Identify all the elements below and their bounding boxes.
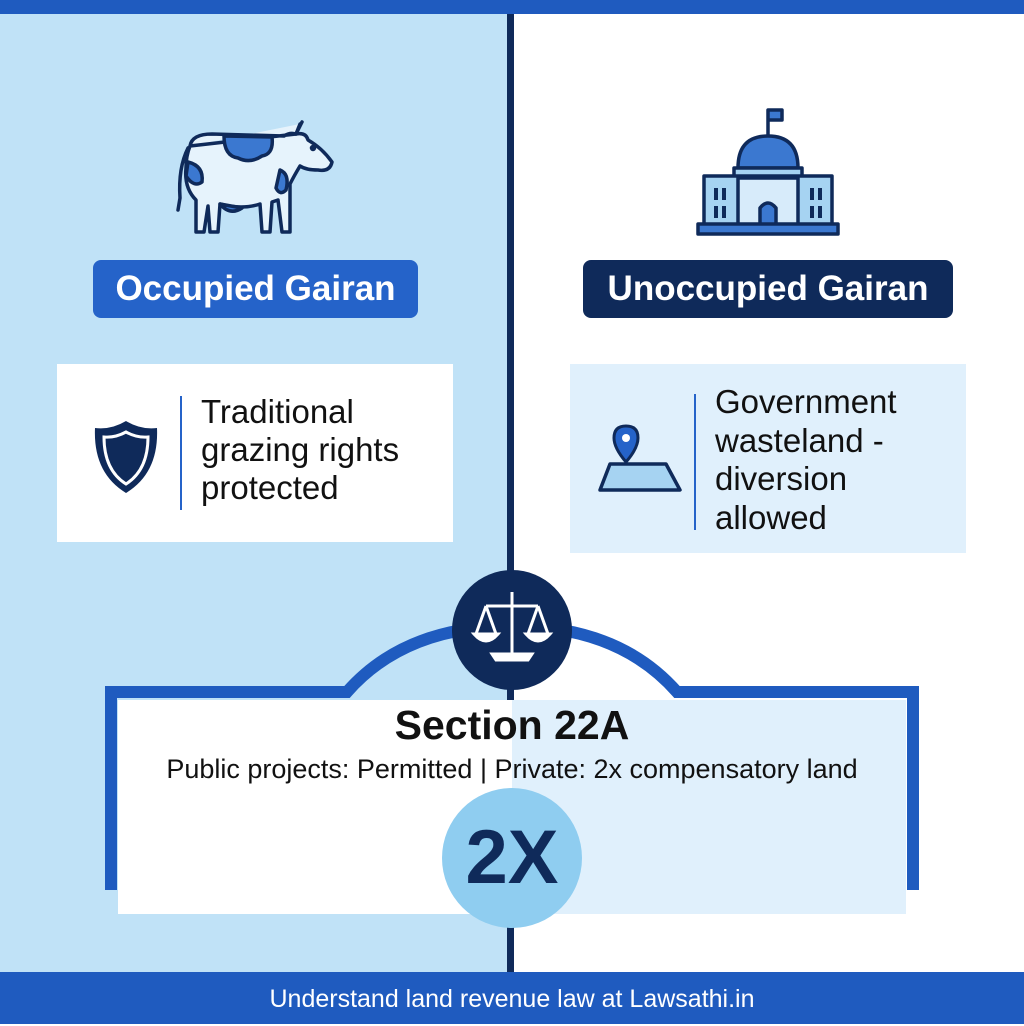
footer (0, 972, 1024, 1024)
divider (507, 14, 514, 974)
text: grazing rights (201, 393, 399, 506)
label: Unoccupied Gairan: Unoccupied Gairan (608, 269, 928, 308)
icon: shield (94, 421, 158, 493)
text: wasteland: Government (715, 383, 897, 420)
panel: Section 22A (105, 570, 919, 928)
footer: Understand land revenue law at Lawsathi.in (269, 985, 755, 1013)
label: Unoccupied Gairan (583, 260, 953, 318)
text: grazing rights: Traditional (201, 393, 354, 430)
left background (0, 0, 508, 1024)
card: occupied (57, 364, 453, 542)
card: unoccupied (570, 364, 966, 553)
icon: government building (696, 108, 840, 236)
icon: scales (452, 570, 572, 690)
text: wasteland (715, 383, 897, 536)
icon: map pin (598, 424, 682, 492)
icon: cow (176, 120, 334, 234)
text: grazing rights: grazing rights (201, 431, 399, 468)
text: wasteland: diversion (715, 460, 847, 497)
text: grazing rights: protected (201, 469, 339, 506)
top bar (0, 0, 1024, 14)
label: Occupied Gairan (93, 260, 418, 318)
text: subtitle: Public projects: Permitted | Private: 2x compensatory land (166, 754, 858, 784)
text: wasteland: wasteland - (715, 422, 884, 458)
label: Occupied Gairan: Occupied Gairan (115, 269, 396, 308)
heading: Section 22A: Section 22A (395, 702, 629, 748)
badge: 2X: 2X (466, 815, 558, 900)
badge: 2X (442, 788, 582, 928)
text: wasteland: allowed (715, 498, 827, 536)
